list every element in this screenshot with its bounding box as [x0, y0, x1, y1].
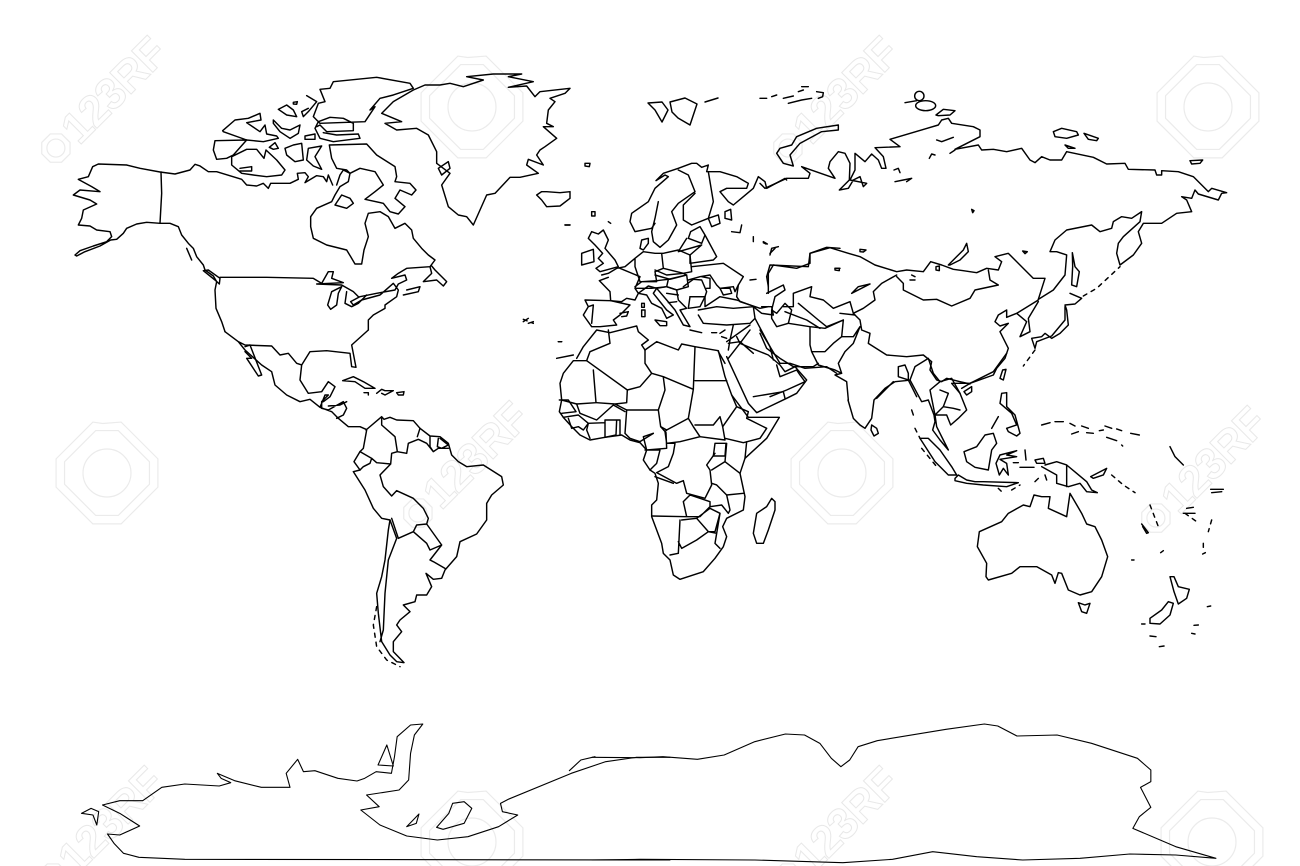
Central Europe — [599, 238, 692, 302]
Iberia — [583, 300, 630, 327]
Southern Africa borders — [652, 477, 730, 555]
Philippines — [992, 393, 1020, 436]
Madagascar — [753, 498, 775, 543]
Lake Baikal and small lakes — [763, 209, 1027, 280]
Central Africa borders — [643, 427, 715, 498]
watermark: camera bottom centre left — [407, 777, 537, 866]
Afghanistan, Pakistan, Iran — [760, 320, 860, 400]
Severnaya Zemlya and Siberian islands — [905, 101, 1203, 164]
New Zealand — [1150, 577, 1189, 624]
Mexico and Central America coasts — [225, 330, 368, 429]
Northern and Sahel borders — [562, 347, 727, 430]
Azores and Madeira — [523, 319, 533, 323]
Russia-Kazakhstan-Mongolia-China border — [767, 248, 1045, 299]
Greenland — [382, 74, 570, 225]
Caribbean islands — [343, 377, 404, 395]
Central and South America — [225, 330, 503, 667]
Atlantic Canada islands — [403, 266, 447, 295]
Ukraine, Moldova, Romania — [683, 263, 743, 297]
Arctic island dashes — [760, 87, 955, 182]
Tasmania — [1078, 603, 1090, 613]
Japan — [1032, 293, 1082, 348]
South America coast — [353, 417, 503, 663]
Sulawesi — [996, 451, 1017, 475]
Mongolia south border — [897, 270, 998, 306]
Sakhalin — [1072, 253, 1079, 287]
Borneo — [964, 433, 997, 470]
United Kingdom and Ireland — [565, 163, 618, 272]
Antarctica — [81, 724, 670, 860]
watermark: text top centre right: 123RF — [784, 28, 908, 153]
Southeast Asia and Oceania — [848, 353, 1223, 647]
Central Asia borders — [767, 275, 897, 328]
Asia and Russia — [760, 87, 1227, 400]
Mediterranean Africa coast — [557, 326, 648, 358]
Antarctica east coast — [592, 724, 1216, 863]
South and Southeast Asia coast — [848, 353, 1007, 450]
borders: Alaska, US-Canada, great lakes — [160, 172, 367, 309]
Baltic states and Belarus — [678, 227, 717, 263]
watermark: camera bottom right — [1147, 777, 1277, 866]
Alaska and Canada mainland coast — [73, 164, 435, 332]
Antarctic islands — [81, 745, 595, 829]
Mainland Southeast Asia borders — [910, 358, 960, 415]
watermark: text middle right: 123RF — [1152, 398, 1276, 523]
Russia-Kazakhstan border west and Caspian — [732, 225, 840, 305]
Kuril and Ryukyu islands — [1023, 267, 1120, 366]
China south border — [853, 313, 970, 398]
Svalbard — [648, 98, 718, 125]
Antarctica west coast — [103, 724, 670, 860]
South America borders — [360, 418, 448, 642]
Pacific island dashes — [912, 410, 1223, 647]
Russia north coast and far east — [760, 118, 1227, 299]
Novaya Zemlya — [777, 125, 838, 166]
Scandinavia and Finland — [630, 163, 787, 247]
China and Korea coast — [962, 300, 1038, 388]
watermark: camera middle centre right — [777, 408, 907, 538]
watermark: camera middle left — [42, 408, 172, 538]
Africa and Arabia — [559, 330, 837, 579]
Europe — [523, 163, 840, 360]
watermark: camera top centre left — [407, 42, 537, 172]
Arabia — [718, 330, 837, 413]
Italy and islands — [638, 286, 673, 326]
Sumatra and Java — [920, 438, 1018, 487]
New Guinea — [1035, 458, 1107, 493]
watermark: camera top right — [1143, 42, 1273, 172]
watermark: text top left: 123RF — [52, 28, 176, 153]
West Africa borders — [559, 400, 653, 442]
Arctic archipelago — [213, 77, 416, 214]
watermark: text middle centre left: 123RF — [414, 393, 538, 518]
Iceland — [523, 192, 570, 342]
Africa coast — [559, 330, 779, 579]
Chilean islands — [373, 607, 400, 667]
Hainan and Taiwan — [964, 369, 1006, 395]
Caspian Sea — [767, 285, 792, 327]
Balkans — [657, 287, 705, 327]
East Africa borders — [688, 395, 767, 495]
North America and Greenland — [73, 74, 570, 342]
Baja California — [245, 345, 262, 376]
Sri Lanka — [871, 425, 878, 436]
Australia — [977, 493, 1108, 595]
Turkey and Levant — [690, 297, 773, 360]
